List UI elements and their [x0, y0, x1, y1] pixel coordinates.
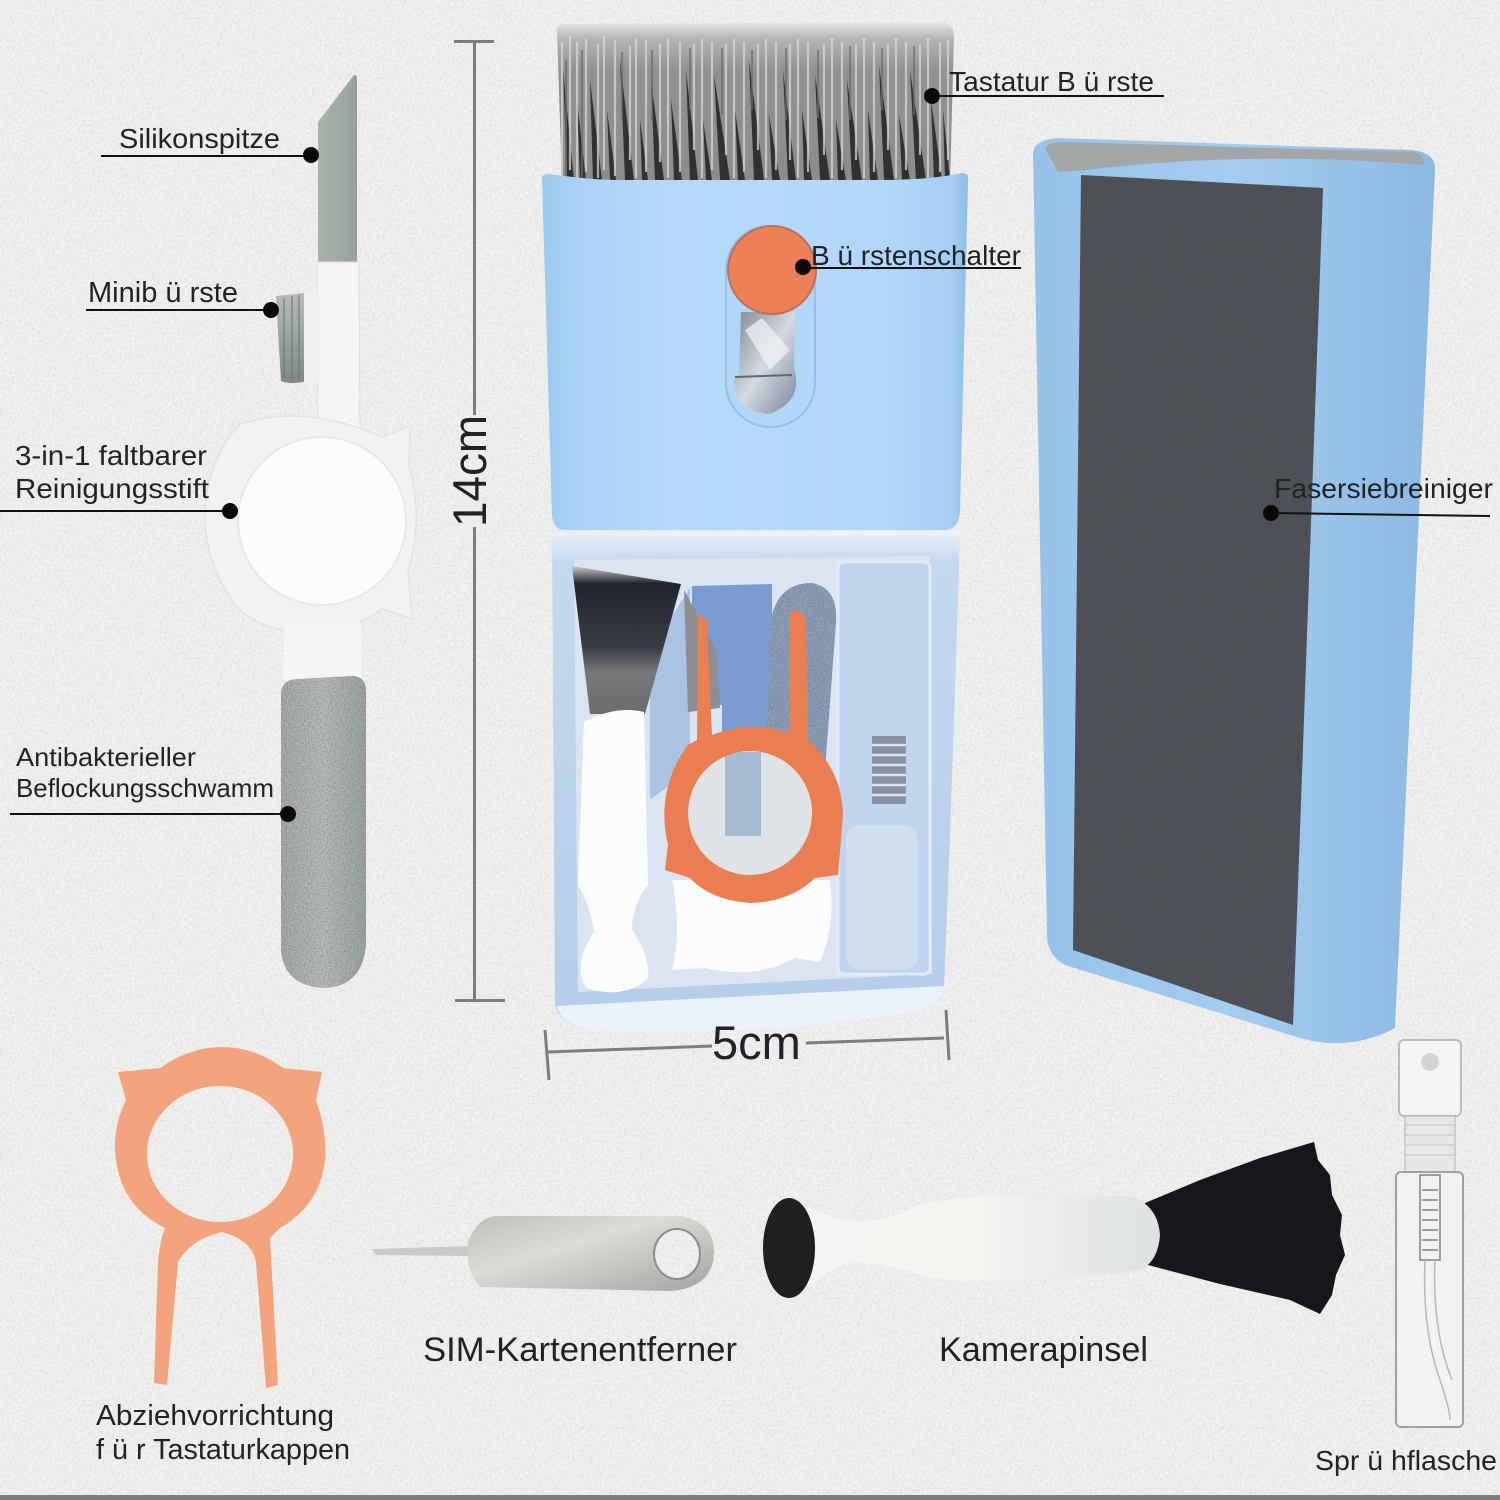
label: SIM-Kartenentferner: SIM-Kartenentferner [423, 1331, 737, 1369]
label: Abziehvorrichtung für Tastaturkappen: Abziehvorrichtung [96, 1400, 334, 1432]
slider window [726, 226, 815, 427]
orange brush switch [728, 226, 816, 314]
transparent drawer [552, 531, 960, 1033]
black bristles [1145, 1142, 1345, 1314]
label: Antibakterieller Beflockungsschwamm: Beflockungsschwamm [16, 773, 274, 803]
height dimension 14cm: 14cm [443, 415, 496, 527]
label: Antibakterieller Beflockungsschwamm [10, 742, 296, 822]
label: Abziehvorrichtung für Tastaturkappen [96, 1400, 350, 1466]
inner sponge [763, 583, 836, 781]
inner grey tip [684, 590, 720, 712]
black end pad [763, 1198, 815, 1298]
label: Minibürste: Minib ü rste [88, 277, 238, 309]
translucent handle [805, 1196, 1160, 1288]
label: Bürstenschalter: B ü rstenschalter [811, 240, 1021, 271]
inner white disc [672, 880, 832, 972]
label: Sprühflasche: Spr ü hflasche [1315, 1445, 1497, 1476]
width dimension 5cm: 5cm [712, 1016, 801, 1069]
inner left tube [650, 588, 690, 800]
label: 3-in-1 faltbarer Reinigungsstift: 3-in-1 faltbarer [15, 440, 207, 471]
label: 3-in-1 faltbarer Reinigungsstift: Reinigungsstift [15, 473, 209, 504]
3-in-1 cleaning pen [205, 75, 416, 988]
width dimension 5cm [545, 1010, 949, 1080]
grey bristles [557, 22, 954, 182]
inner tall blue tube [692, 584, 772, 838]
label: Antibakterieller Beflockungsschwamm: Antibakterieller [16, 742, 196, 772]
height dimension 14cm [443, 40, 505, 1002]
spray bottle [1396, 1040, 1463, 1427]
camera brush [763, 1142, 1345, 1314]
SIM card remover [372, 1216, 714, 1291]
flocked sponge [281, 676, 366, 988]
keyboard brush unit [542, 22, 968, 1033]
label: Fasersiebreiniger: Fasersiebreiniger [1274, 473, 1493, 504]
label: Minibürste [86, 277, 279, 318]
label: Abziehvorrichtung für Tastaturkappen: f ü r Tastaturkappen [96, 1434, 350, 1466]
keycap puller [115, 1047, 325, 1388]
lower stem [283, 622, 361, 680]
pen stem [317, 262, 360, 430]
label: 3-in-1 faltbarer Reinigungsstift [0, 440, 238, 519]
folding hinge disc [205, 416, 416, 631]
mini brush [276, 291, 319, 384]
dark sponge pad [1073, 175, 1323, 1025]
label: Fasersiebreiniger [1263, 473, 1493, 521]
silicone tip [318, 75, 357, 262]
label: Silikonspitze [101, 123, 319, 163]
inner lens disc [686, 749, 814, 877]
blue case with fibre screen cleaner [1033, 138, 1435, 1043]
inner camera brush [572, 566, 681, 992]
label: Silikonspitze: Silikonspitze [119, 123, 280, 154]
label: Kamerapinsel: Kamerapinsel [939, 1331, 1148, 1369]
label: Tastatur Bürste [924, 66, 1164, 104]
label: Tastatur Bürste: Tastatur B ü rste [949, 66, 1154, 97]
blue upper body [542, 173, 968, 530]
inner spray bottle [838, 562, 930, 974]
inner orange keycap puller [664, 610, 843, 903]
